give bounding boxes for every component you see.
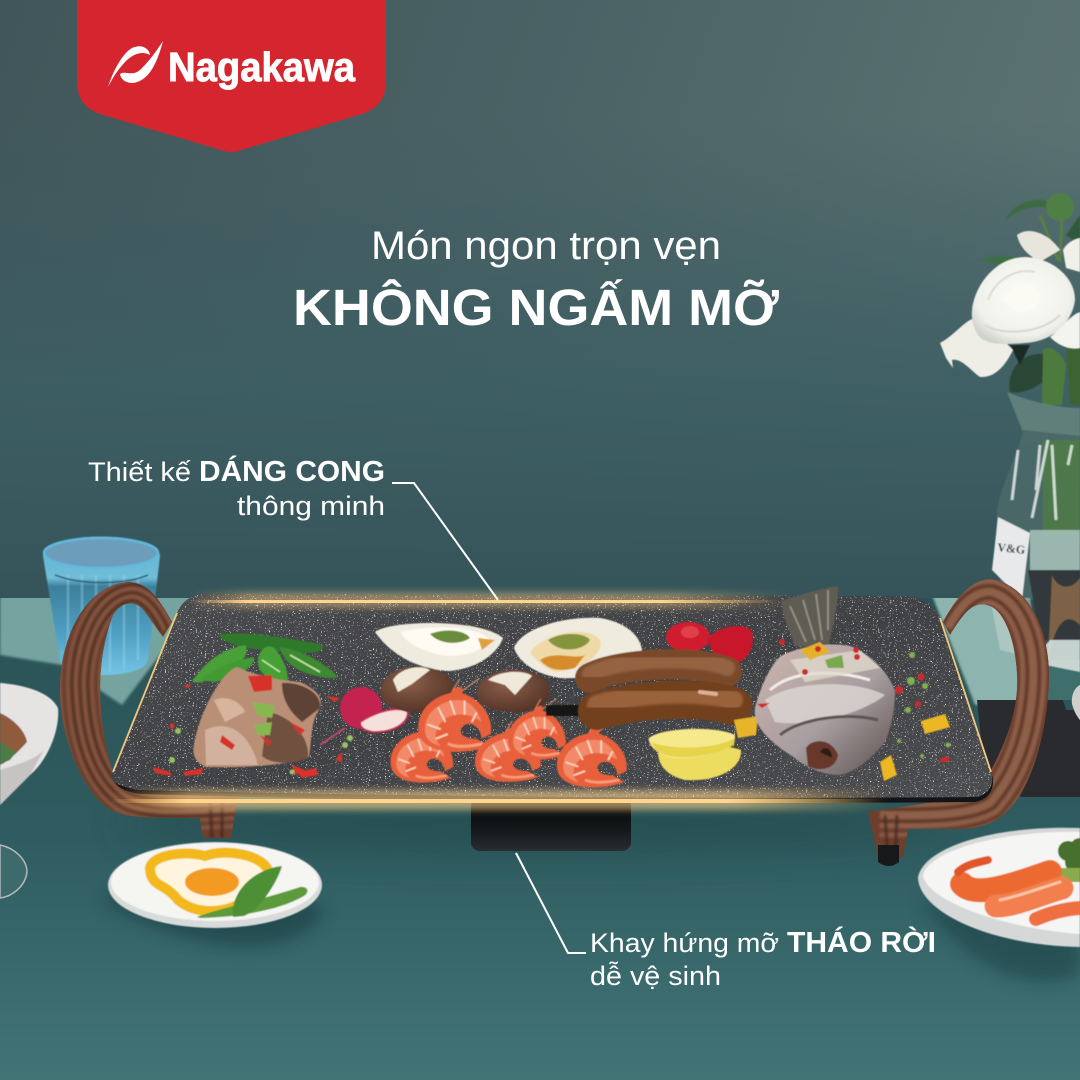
food: grilled pork bbox=[193, 667, 321, 767]
speckle texture bbox=[105, 590, 1000, 802]
glow: bottom edge bbox=[110, 790, 890, 810]
brand badge bbox=[77, 0, 386, 152]
fried egg yolk bbox=[185, 868, 239, 896]
dark groove behind sausages bbox=[546, 705, 580, 716]
callout: removable tray bbox=[516, 853, 936, 991]
callout: removable tray: THÁO RỜI bbox=[787, 925, 936, 959]
vase label: V&G bbox=[997, 540, 1026, 557]
right wood handle bbox=[868, 579, 1049, 866]
callout: removable tray: dễ vệ sinh bbox=[590, 960, 721, 991]
food: yellow pepper behind fish bbox=[734, 716, 758, 738]
food: yellow pepper pieces bbox=[880, 714, 950, 781]
food: snow peas bbox=[192, 633, 338, 683]
callout: curved design: Thiết kế bbox=[88, 457, 191, 487]
table surface bbox=[0, 590, 1080, 1080]
callout: curved design: thông minh bbox=[237, 491, 385, 521]
left wood handle bbox=[60, 582, 238, 838]
callout: curved design: DÁNG CONG bbox=[199, 454, 385, 488]
leader line to plate bbox=[392, 483, 498, 600]
food: scallop shell left bbox=[375, 623, 503, 671]
blue water glass bbox=[43, 536, 160, 675]
yellow pepper ring bbox=[150, 853, 268, 911]
green peas bbox=[197, 887, 307, 918]
leader line to tray bbox=[516, 853, 586, 953]
right shrimp bowl bbox=[918, 828, 1080, 947]
logo mark bbox=[108, 41, 163, 87]
food: shrimps bbox=[391, 679, 627, 787]
callout: curved design bbox=[88, 454, 498, 600]
small white rose bbox=[1017, 231, 1060, 262]
flower vase bbox=[940, 193, 1080, 672]
callout: removable tray: Khay hứng mỡ bbox=[590, 928, 779, 958]
plate underside bbox=[113, 774, 993, 803]
bowl shrimps bbox=[958, 860, 1080, 919]
right power connector bbox=[977, 685, 1080, 797]
large white rose bbox=[972, 257, 1080, 348]
food: whole fish bbox=[755, 586, 950, 775]
headline: Món ngon trọn vẹn bbox=[371, 224, 721, 268]
rubber foot bbox=[878, 845, 899, 866]
vase label bbox=[992, 517, 1030, 600]
background wall bbox=[0, 0, 1080, 600]
flower stems and leaves bbox=[980, 193, 1080, 405]
grill plate bbox=[105, 590, 1000, 802]
food: lemon slices bbox=[649, 729, 741, 780]
food: sausages bbox=[590, 660, 733, 711]
broccoli bbox=[1058, 838, 1080, 882]
grease drip tray bbox=[471, 797, 631, 851]
headline bbox=[293, 224, 780, 336]
headline: KHÔNG NGẤM MỠ bbox=[293, 278, 780, 336]
food: tomatoes bbox=[666, 622, 753, 664]
food: radish bbox=[320, 687, 408, 745]
food: mushrooms bbox=[380, 667, 550, 712]
left white bowl bbox=[0, 683, 58, 805]
food: chili and herb flakes left bbox=[153, 684, 342, 778]
food: all items on the grill bbox=[153, 586, 950, 787]
glow: top edge bbox=[190, 592, 790, 608]
side white flower bbox=[940, 318, 1013, 377]
glow: side edges bbox=[113, 613, 991, 772]
food: scallop shell right bbox=[514, 618, 642, 678]
small glass dish bbox=[0, 845, 27, 898]
logo wordmark: Nagakawa bbox=[168, 44, 356, 90]
egg dish bbox=[108, 842, 322, 928]
glass vase bbox=[990, 392, 1080, 672]
